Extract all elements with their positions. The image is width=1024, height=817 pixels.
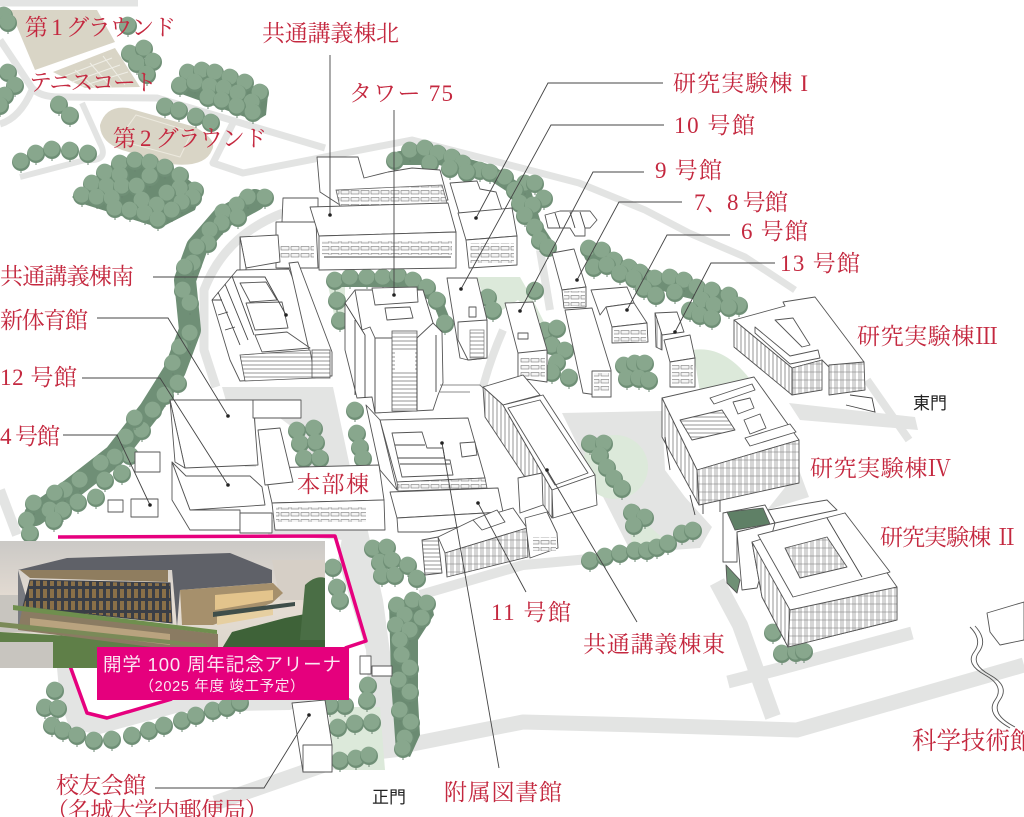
label: 6号館: 6 号館 (741, 219, 808, 244)
label: 新体育館: 新体育館 (0, 308, 88, 333)
trees: forest south (72, 152, 204, 231)
building: 新体育館 (170, 400, 301, 468)
label: 共通講義棟北: 共通講義棟北 (262, 21, 399, 46)
building: 研究実験棟IV (662, 377, 799, 515)
label: 第1グラウンド: 第 1 グラウンド (25, 15, 176, 40)
label: 12号館: 12 号館 (0, 365, 77, 390)
label: 7、8号館: 7、8 号館 (694, 190, 788, 215)
label: 4号館: 4 号館 (0, 424, 60, 449)
label: テニスコート: テニスコート (29, 70, 157, 95)
building: 4号館 (108, 452, 160, 517)
building: 共通講義棟北 (240, 157, 456, 275)
building: 9号館 (505, 302, 547, 382)
trees: forest north (171, 62, 269, 124)
label: 11号館: 11 号館 (491, 600, 571, 625)
arena banner (97, 647, 349, 700)
label: 校友会館: 校友会館 (56, 773, 146, 798)
trees: northwest groups (0, 7, 220, 173)
building: 13号館 (655, 312, 695, 387)
label: 研究実験棟I: 研究実験棟 I (673, 71, 808, 96)
tennis court (53, 48, 140, 88)
arena banner: （2025 年度 竣工予定） (140, 678, 304, 695)
trees: east belt (580, 240, 748, 392)
lawns (328, 277, 752, 770)
label: 正門: 正門 (372, 788, 406, 807)
arena photo (0, 541, 325, 668)
building: 科学技術館 (970, 602, 1024, 728)
label: 共通講義棟南: 共通講義棟南 (0, 264, 134, 289)
label: 第2グラウンド: 第 2 グラウンド (113, 126, 267, 151)
label: 東門: 東門 (913, 394, 947, 413)
leader lines (63, 55, 775, 788)
building: 7・8号館 (552, 249, 611, 397)
building: 校友会館 (292, 656, 392, 772)
arena banner: 開学 100 周年記念アリーナ (103, 654, 341, 675)
label: 13号館: 13 号館 (780, 251, 860, 276)
building: 研究実験棟I (450, 181, 517, 268)
building: 11号館 (390, 488, 503, 532)
building: 研究実験棟III (734, 297, 875, 412)
label: 10号館: 10 号館 (674, 113, 755, 138)
label: 共通講義棟東: 共通講義棟東 (583, 632, 725, 657)
building: 共通講義棟東 (483, 375, 597, 518)
building: 10号館 (447, 278, 487, 360)
building: タワー75 (345, 287, 485, 413)
trees: north belt (386, 140, 557, 259)
label: 附属図書館: 附属図書館 (444, 780, 562, 805)
label: 研究実験棟IV: 研究実験棟Ⅳ (810, 456, 951, 481)
building: 附属図書館 (366, 405, 487, 491)
building: 研究実験棟II (723, 500, 897, 647)
ground: 第1グラウンド (10, 10, 115, 70)
ground: 第2グラウンド (100, 108, 213, 165)
building: 6号館 (591, 287, 648, 343)
trees: arena surroundings (36, 559, 381, 772)
small sheds (545, 211, 597, 236)
arena outline (58, 536, 366, 718)
label: 研究実験棟II: 研究実験棟 Ⅱ (880, 525, 1018, 550)
trees: main gate column (387, 592, 436, 760)
trees: central groups (288, 267, 813, 665)
building: 12号館 (172, 462, 272, 533)
label: 研究実験棟III: 研究実験棟Ⅲ (857, 324, 998, 349)
trees: west belt (18, 189, 274, 545)
label: 9号館: 9 号館 (655, 158, 722, 183)
building: 共通講義棟南 (212, 262, 332, 381)
label: タワー75: タワー 75 (349, 81, 453, 106)
building: 長屋棟 (422, 508, 558, 577)
building: 本部棟 (258, 428, 385, 530)
label: 本部棟: 本部棟 (297, 472, 369, 497)
